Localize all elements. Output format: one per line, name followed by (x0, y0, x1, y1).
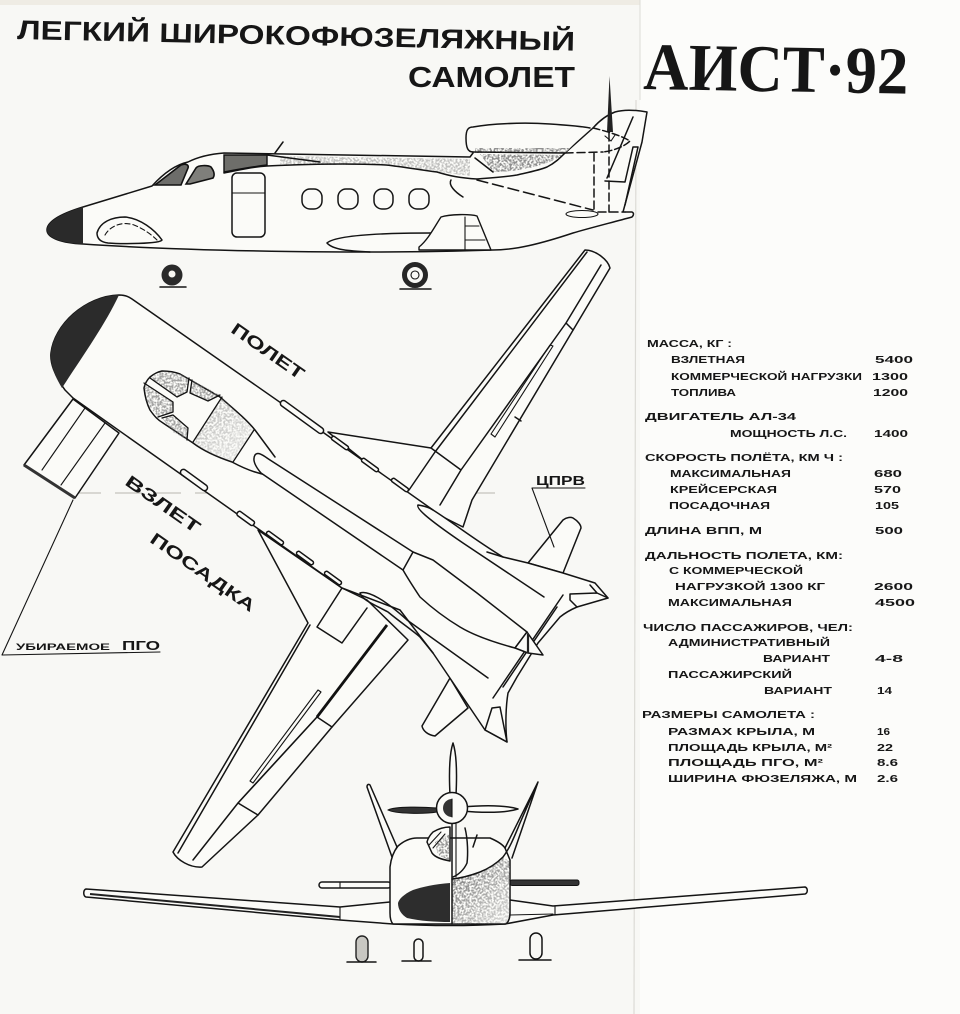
side view: wing root and main gear pod (327, 215, 491, 252)
callout: retractable foreplane: УБИРАЕМОЕ (16, 642, 110, 653)
spec group: mass: 1200 (873, 387, 908, 399)
spec group: mass (647, 338, 913, 399)
front view: propeller (388, 743, 518, 824)
spec group: passengers: ВАРИАНТ (764, 685, 833, 697)
top view: ventral stabilizer stub (422, 678, 468, 736)
side view: cabin door (232, 173, 265, 237)
front view of aircraft (84, 743, 807, 962)
spec group: dimensions: 2.6 (877, 773, 898, 785)
specifications table (642, 338, 915, 785)
spec group: speed: ПОСАДОЧНАЯ (669, 500, 770, 512)
spec group: dimensions: 8.6 (877, 757, 898, 769)
spec group: range: НАГРУЗКОЙ 1300 КГ (675, 580, 825, 593)
spec group: passengers: 14 (877, 685, 892, 697)
spec group: mass: КОММЕРЧЕСКОЙ НАГРУЗКИ (671, 370, 862, 383)
top view: tail tips and central fin (485, 585, 608, 742)
title: light wide-body aircraft (17, 14, 575, 94)
spec group: runway length: ДЛИНА ВПП, М (645, 525, 762, 537)
top view: flap track fairings (179, 399, 409, 585)
spec group: passengers: ЧИСЛО ПАССАЖИРОВ, ЧЕЛ: (643, 622, 853, 634)
spec group: dimensions: ПЛОЩАДЬ ПГО, М² (668, 757, 824, 769)
top view: fuselage (51, 295, 608, 742)
side view: nose wheel (160, 264, 186, 287)
front view: dark nose cone (398, 883, 450, 922)
spec group: passengers: АДМИНИСТРАТИВНЫЙ (668, 636, 830, 649)
spec group: mass: 1300 (872, 371, 908, 383)
spec group: dimensions: РАЗМЕРЫ САМОЛЕТА : (642, 709, 815, 721)
spec group: engine: ДВИГАТЕЛЬ АЛ-34 (645, 411, 796, 423)
top view: lower nacelle fairing (360, 592, 488, 678)
top view: canopy shading (144, 371, 254, 462)
spec group: dimensions: РАЗМАХ КРЫЛА, М (668, 726, 815, 738)
front view: landing gear wheels (347, 933, 551, 962)
top view: upper nacelle fairing (418, 505, 544, 597)
title: AIST-92 name: АИСТ·92 (643, 30, 909, 109)
top view: central engine cowl (254, 454, 527, 648)
title: light wide-body aircraft: ЛЕГКИЙ ШИРОКОФЮЗЕЛЯЖНЫЙ (17, 14, 575, 57)
callout: CPRV (532, 473, 585, 547)
spec group: speed: 680 (874, 468, 902, 480)
top view: lower wing (173, 530, 408, 867)
top view: canopy (144, 371, 275, 475)
spec group: dimensions: 16 (877, 726, 890, 738)
spec group: mass: ТОПЛИВА (671, 387, 737, 399)
front view: shaded right half (452, 857, 510, 924)
spec group: engine: 1400 (874, 428, 908, 440)
side view: dashed engine duct (450, 180, 598, 218)
spec group: dimensions: ПЛОЩАДЬ КРЫЛА, М² (668, 742, 833, 754)
spec group: range: 2600 (874, 581, 913, 593)
spec group: speed: КРЕЙСЕРСКАЯ (670, 483, 777, 496)
spec group: mass: МАССА, КГ : (647, 338, 732, 350)
label: landing mode: ПОСАДКА (146, 529, 259, 616)
spec group: speed: МАКСИМАЛЬНАЯ (670, 468, 791, 480)
title: light wide-body aircraft: САМОЛЕТ (408, 62, 575, 94)
callout: retractable foreplane: ПГО (122, 639, 160, 653)
side view of aircraft (47, 76, 647, 289)
side view: nose gear bay (97, 217, 162, 244)
spec group: runway length (645, 525, 903, 537)
spec group: dimensions: ШИРИНА ФЮЗЕЛЯЖА, М (668, 773, 857, 785)
spec group: range: 4500 (875, 597, 915, 609)
side view: cabin windows (302, 189, 429, 209)
spec group: runway length: 500 (875, 525, 903, 537)
spec group: passengers: 4-8 (875, 653, 903, 665)
side view: tail fin and pusher propeller (466, 76, 647, 212)
side view: main wheel (400, 264, 431, 289)
spec group: engine (645, 411, 908, 440)
spec group: range: С КОММЕРЧЕСКОЙ (669, 564, 803, 577)
top view: upper wing (328, 250, 610, 527)
top view: retractable foreplane (24, 399, 119, 498)
label: flight mode: ПОЛЕТ (227, 319, 309, 384)
front view: wings (84, 887, 807, 926)
label: takeoff mode: ВЗЛЕТ (122, 472, 205, 538)
spec group: passengers (643, 622, 903, 697)
spec group: mass: ВЗЛЕТНАЯ (671, 354, 745, 366)
front view: left fin (367, 784, 397, 857)
front view: stabilizers (319, 880, 579, 888)
side view: upper fairing (224, 142, 565, 179)
spec group: range: МАКСИМАЛЬНАЯ (668, 597, 792, 609)
spec group: passengers: ПАССАЖИРСКИЙ (668, 668, 792, 681)
spec group: speed: 570 (874, 484, 901, 496)
spec group: engine: МОЩНОСТЬ Л.С. (730, 428, 847, 440)
spec group: range (645, 550, 915, 609)
spec group: range: ДАЛЬНОСТЬ ПОЛЕТА, КМ: (645, 550, 843, 562)
spec group: dimensions: 22 (877, 742, 893, 754)
side view: nose cone (47, 207, 83, 244)
spec group: mass: 5400 (875, 354, 913, 366)
spec group: speed: СКОРОСТЬ ПОЛЁТА, КМ Ч : (645, 451, 843, 464)
top view: dorsal stabilizer stub (528, 517, 581, 573)
front view: fuselage (390, 838, 510, 924)
side view: fuselage (47, 153, 634, 252)
top view of aircraft (2, 250, 610, 867)
front view: canopy (427, 824, 477, 924)
side view: cockpit windows (155, 155, 267, 185)
callout: retractable foreplane (2, 500, 160, 655)
front view: right fin (452, 782, 538, 879)
callout: CPRV: ЦПРВ (536, 473, 585, 488)
spec group: dimensions (642, 709, 898, 785)
spec group: speed (645, 451, 902, 512)
spec group: passengers: ВАРИАНТ (763, 653, 831, 665)
spec group: speed: 105 (875, 500, 899, 512)
top view: radome (51, 295, 119, 388)
